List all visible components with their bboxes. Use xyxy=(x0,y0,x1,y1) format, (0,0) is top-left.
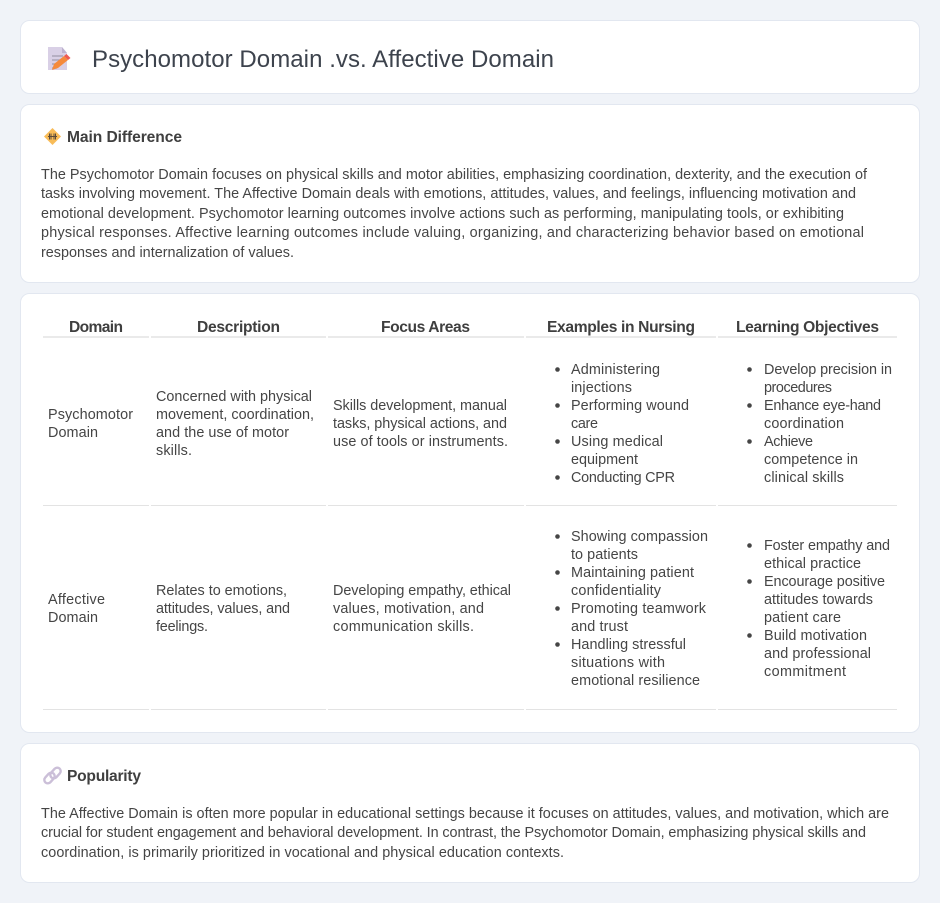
list: nursing examples: injections xyxy=(571,380,632,396)
text block: main difference: tasks involving movement. The Affective Domain deals with emotions, attitudes, values, and feelings, influencing motivation and xyxy=(41,186,856,202)
text block: popularity: crucial for student engagement and behavioral development. In contrast, the Psychomotor Domain, emphasizing physical skills and xyxy=(41,825,866,841)
table header row: Domain xyxy=(69,319,123,336)
table row: affective domain: communication skills. xyxy=(333,619,474,635)
list: nursing examples xyxy=(555,362,689,486)
table row: psychomotor domain: use of tools or instruments. xyxy=(333,434,508,450)
table row: psychomotor domain xyxy=(48,362,892,486)
list: nursing examples: Administering xyxy=(571,362,660,378)
table row: psychomotor domain: Concerned with physical xyxy=(156,389,312,405)
list: nursing examples: emotional resilience xyxy=(571,673,700,689)
table row: affective domain: Affective xyxy=(48,592,105,608)
list: learning objectives: Enhance eye-hand xyxy=(764,398,881,414)
icon: chain link xyxy=(43,766,62,785)
list: learning objectives: Foster empathy and xyxy=(764,538,890,554)
text block: popularity: coordination, is primarily prioritized in vocational and physical education contexts. xyxy=(41,845,564,861)
icon: orange diamond xyxy=(44,128,61,145)
list: learning objectives: Encourage positive xyxy=(764,574,885,590)
list: nursing examples: equipment xyxy=(571,452,638,468)
list: nursing examples: and trust xyxy=(571,619,628,635)
table header row: Focus Areas xyxy=(381,319,470,336)
table row: affective domain: values, motivation, and xyxy=(333,601,484,617)
panel: main difference xyxy=(20,104,920,282)
icon: document with pencil xyxy=(48,47,70,70)
table row: affective domain: Relates to emotions, xyxy=(156,583,287,599)
list: nursing examples: confidentiality xyxy=(571,583,662,599)
list: nursing examples: to patients xyxy=(571,547,638,563)
list: nursing examples: Promoting teamwork xyxy=(571,601,707,617)
table row: affective domain: feelings. xyxy=(156,619,208,635)
table row: psychomotor domain: Psychomotor xyxy=(48,407,133,423)
table header row: Examples in Nursing xyxy=(547,319,695,336)
panel: comparison table xyxy=(20,294,920,732)
list: nursing examples: Handling stressful xyxy=(571,637,686,653)
list: learning objectives: competence in xyxy=(764,452,858,468)
heading: main difference: Main Difference xyxy=(67,129,182,146)
table header row: Learning Objectives xyxy=(736,319,879,336)
text block: main difference: The Psychomotor Domain focuses on physical skills and motor abilities, emphasizing coordination, dexterity, and the execution of xyxy=(41,167,868,183)
table row: psychomotor domain: Domain xyxy=(48,425,98,441)
list: nursing examples: situations with xyxy=(571,655,665,671)
list: learning objectives: patient care xyxy=(764,610,841,626)
list: learning objectives: ethical practice xyxy=(764,556,861,572)
list: nursing examples: Showing compassion xyxy=(571,529,708,545)
list: nursing examples: Conducting CPR xyxy=(571,470,675,486)
list: learning objectives: Achieve xyxy=(764,434,813,450)
list: learning objectives: clinical skills xyxy=(764,470,844,486)
list: learning objectives: coordination xyxy=(764,416,844,432)
table row: affective domain: attitudes, values, and xyxy=(156,601,290,617)
list: nursing examples: Using medical xyxy=(571,434,663,450)
list: learning objectives: Build motivation xyxy=(764,628,867,644)
title: Psychomotor Domain .vs. Affective Domain xyxy=(92,46,554,73)
table row: affective domain: Developing empathy, ethical xyxy=(333,583,511,599)
panel: page header xyxy=(20,20,920,94)
list: learning objectives xyxy=(747,362,892,486)
list: learning objectives: procedures xyxy=(764,380,832,396)
list: learning objectives: commitment xyxy=(764,664,846,680)
table row: psychomotor domain: tasks, physical actions, and xyxy=(333,416,507,432)
text block: main difference xyxy=(41,167,868,261)
table header row: Description xyxy=(197,319,280,336)
heading: popularity: Popularity xyxy=(67,768,141,785)
list: learning objectives: and professional xyxy=(764,646,871,662)
table header row xyxy=(69,319,879,336)
table row: affective domain: Domain xyxy=(48,610,98,626)
table row: affective domain xyxy=(48,529,890,689)
text block: main difference: emotional development. Psychomotor learning outcomes involve actions such as performing, manipulating tools, or exhibiting xyxy=(41,206,844,222)
list: learning objectives xyxy=(747,538,890,680)
list: nursing examples xyxy=(555,529,708,689)
list: learning objectives: Develop precision in xyxy=(764,362,892,378)
text block: popularity xyxy=(41,806,889,861)
list: nursing examples: Performing wound xyxy=(571,398,689,414)
text block: main difference: responses and internalization of values. xyxy=(41,245,294,261)
list: nursing examples: care xyxy=(571,416,598,432)
panel: popularity xyxy=(20,744,920,882)
table row: psychomotor domain: and the use of motor xyxy=(156,425,289,441)
text block: main difference: physical responses. Affective learning outcomes include valuing, organizing, and characterizing behavior based on emotional xyxy=(41,225,864,241)
table row: psychomotor domain: Skills development, manual xyxy=(333,398,507,414)
table row: psychomotor domain: skills. xyxy=(156,443,192,459)
table row: psychomotor domain: movement, coordination, xyxy=(156,407,314,423)
text block: popularity: The Affective Domain is often more popular in educational settings because it focuses on attitudes, values, and motivation, which are xyxy=(41,806,889,822)
list: learning objectives: attitudes towards xyxy=(764,592,873,608)
list: nursing examples: Maintaining patient xyxy=(571,565,694,581)
